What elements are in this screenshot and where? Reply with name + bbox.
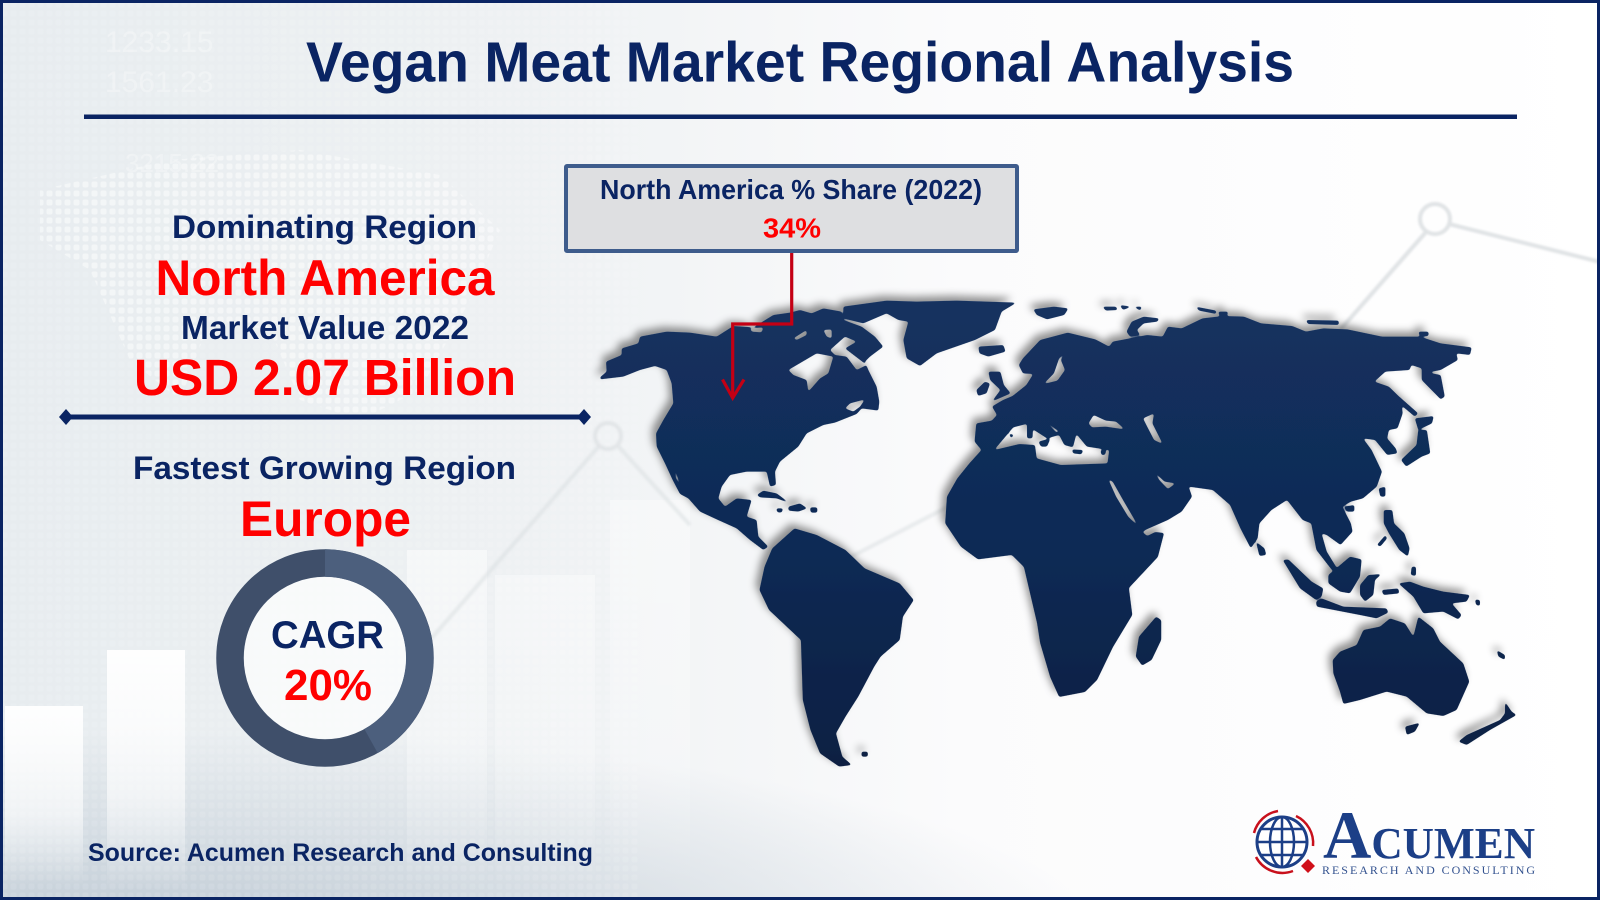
heading: fastest growing: Fastest Growing Region (133, 450, 516, 486)
donut chart: CAGR (230, 563, 420, 753)
background: 3215.22 (125, 148, 219, 178)
world map (594, 290, 1516, 766)
background: 1233.15 (105, 26, 213, 59)
wordmark: ACUMEN (1323, 797, 1535, 873)
icon: globe (1254, 811, 1315, 873)
background: 1561.23 (105, 66, 213, 99)
heading: market value: Market Value 2022 (181, 309, 469, 346)
panel: fastest growing region (133, 450, 516, 547)
callout value: 34% (763, 212, 821, 244)
value: europe: Europe (240, 491, 411, 547)
title rule (84, 114, 1517, 119)
divider with diamonds (59, 409, 591, 425)
value: market size: USD 2.07 Billion (134, 349, 516, 406)
donut label: CAGR (271, 614, 384, 657)
logo: Acumen Research and Consulting (1254, 797, 1535, 877)
value: north america: North America (156, 250, 496, 306)
callout: north america share (566, 166, 1017, 251)
donut value: 20% (284, 661, 372, 710)
source note: Source: Acumen Research and Consulting (88, 839, 593, 867)
callout label: North America % Share (2022) (600, 174, 982, 205)
title: Vegan Meat Market Regional Analysis (306, 30, 1294, 94)
wordmark tagline: RESEARCH AND CONSULTING (1322, 863, 1535, 877)
arrow: callout to north america (722, 253, 792, 398)
panel: dominating region (134, 209, 516, 406)
heading: dominating region: Dominating Region (172, 209, 477, 245)
